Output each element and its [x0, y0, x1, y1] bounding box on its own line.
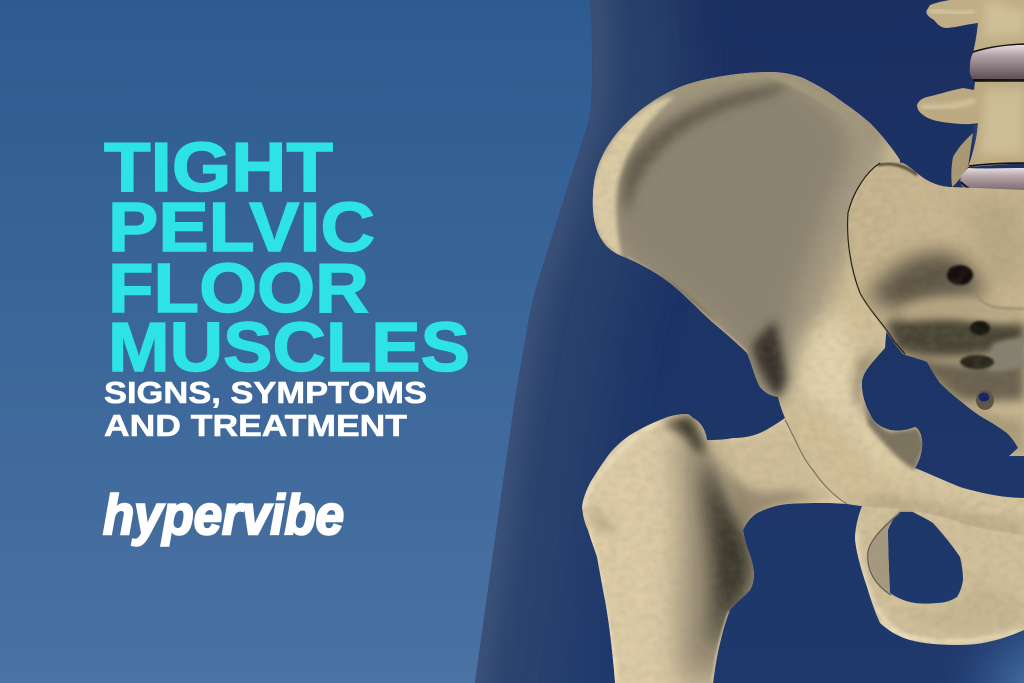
ischium wing shadow — [862, 398, 922, 472]
sacrum — [845, 160, 1024, 456]
bone surface texture — [584, 130, 1024, 678]
ilium dark upper band — [624, 84, 786, 215]
lumbar vertebra upper — [926, 0, 1024, 53]
title line 2: PELVIC — [108, 188, 375, 266]
lumbar vertebra lower — [917, 82, 1024, 187]
foramen 1 — [947, 265, 973, 285]
pubic ring and obturator foramen — [855, 506, 1024, 645]
sacrum upper shadow band — [866, 252, 988, 312]
illustration: pelvis skeleton — [578, 0, 1024, 683]
foramen 4 — [976, 390, 994, 410]
subtitle line 1: SIGNS, SYMPTOMS — [104, 375, 427, 410]
ilium lower recess shadow — [752, 320, 788, 398]
ilium light transition — [590, 60, 920, 400]
femoral neck joint line — [785, 420, 847, 504]
sacrum lower shadow band — [885, 316, 1024, 357]
ilium lower edge rim — [627, 258, 747, 353]
acetabulum and ramus bright area — [795, 310, 1024, 505]
title: Tight Pelvic Floor Muscles — [104, 128, 470, 386]
background: dark blue silhouette — [470, 0, 1024, 683]
ilium top rim — [676, 72, 825, 103]
logo: hypervibe: hypervibe — [103, 483, 344, 546]
subtitle line 2: AND TREATMENT — [104, 408, 407, 443]
femur — [578, 408, 853, 683]
ilium inner fossa shading — [611, 82, 850, 395]
trochanter deep shadow — [704, 450, 753, 650]
foramen 2 — [970, 321, 990, 335]
subtitle: signs, symptoms and treatment — [104, 375, 427, 443]
sacroiliac joint line — [848, 163, 905, 354]
intervertebral disc upper — [970, 45, 1024, 80]
title line 1: TIGHT — [104, 128, 333, 206]
femur neck — [716, 420, 828, 523]
ilium left rim highlight — [590, 96, 675, 258]
sacrum right body shade — [968, 202, 1022, 283]
sacrum light ledge — [900, 300, 1024, 320]
femur shaft mid shadow — [672, 433, 760, 683]
sacral foramina — [947, 265, 994, 410]
foramen 3 — [960, 355, 994, 369]
intervertebral disc lower — [960, 168, 1024, 198]
title line 4: MUSCLES — [108, 308, 470, 386]
title line 3: FLOOR — [108, 249, 369, 327]
hip bone: ilium wing, acetabulum and pubic ramus — [585, 60, 1024, 545]
